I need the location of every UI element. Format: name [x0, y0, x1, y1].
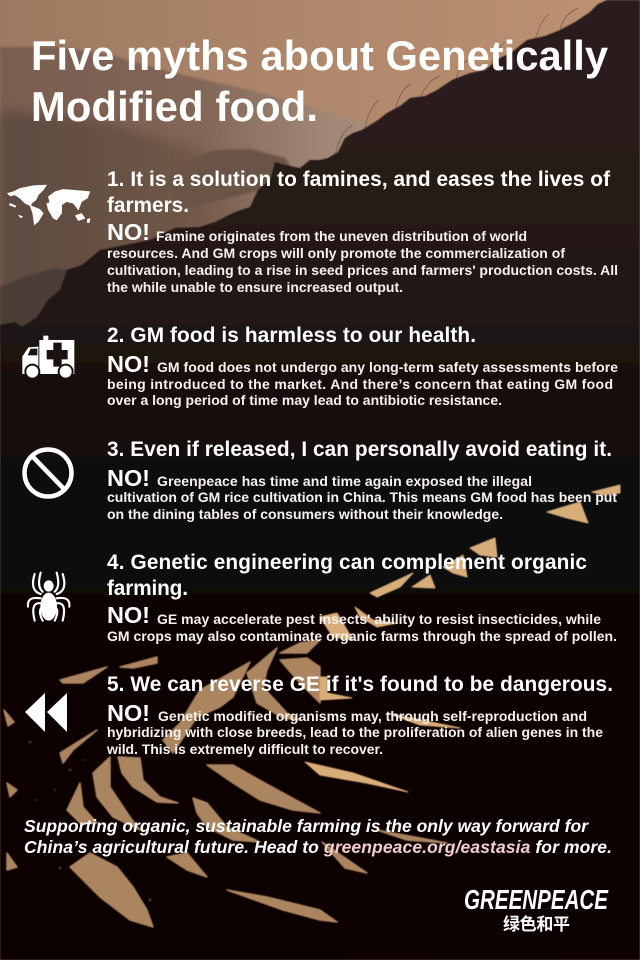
icon: world map: [7, 185, 90, 225]
answer: myth 1: resources. And GM crops will only promote the commercialization of: [107, 245, 565, 261]
closing call to action: Supporting organic, sustainable farming is the only way forward for: [24, 816, 589, 836]
answer: myth 2: [107, 351, 618, 408]
icon: ambulance: [22, 336, 74, 380]
heading: myth 1: 1. It is a solution to famines, and eases the lives of: [107, 168, 610, 191]
panel: myth 2: [22, 324, 618, 408]
logo: Greenpeace: 绿色和平: [503, 914, 570, 934]
answer: myth 1: [107, 219, 618, 295]
answer: myth 4: GM crops may also contaminate organic farms through the spread of pollen.: [107, 628, 617, 644]
answer: myth 2: over a long period of time may lead to antibiotic resistance.: [107, 392, 502, 408]
answer: myth 1: the while unable to ensure increased output.: [107, 279, 403, 295]
closing call to action: China’s agricultural future. Head to greenpeace.org/eastasia for more.: [24, 837, 612, 857]
answer: myth 5: [106, 700, 603, 757]
answer: myth 2: NO!: [107, 351, 150, 377]
answer: myth 1: Famine originates from the uneven distribution of world: [156, 228, 527, 244]
answer: myth 1: NO!: [107, 219, 150, 245]
icon: rewind: [25, 693, 67, 732]
answer: myth 3: on the dining tables of consumers without their knowledge.: [107, 506, 503, 522]
answer: myth 3: [107, 465, 617, 522]
heading: myth 3: 3. Even if released, I can personally avoid eating it.: [107, 438, 612, 461]
panel: myth 4: [28, 551, 617, 644]
panel: myth 1: [7, 168, 618, 295]
heading: myth 4: 4. Genetic engineering can complement organic: [107, 551, 587, 574]
answer: myth 3: Greenpeace has time and time again exposed the illegal: [157, 473, 532, 489]
title: Five myths about Genetically: [31, 32, 608, 79]
answer: myth 5: wild. This is extremely difficult to recover.: [106, 741, 383, 757]
answer: myth 2: GM food does not undergo any long-term safety assessments before: [157, 359, 618, 375]
answer: myth 5: hybridizing with close breeds, lead to the proliferation of alien genes in the: [107, 724, 603, 740]
heading: myth 4: [107, 551, 587, 600]
answer: myth 2: being introduced to the market. And there’s concern that eating GM food: [107, 376, 613, 392]
title: Modified food.: [31, 83, 318, 130]
answer: myth 5: Genetic modified organisms may, through self-reproduction and: [158, 708, 587, 724]
title: [31, 32, 608, 130]
answer: myth 5: NO!: [107, 700, 150, 726]
closing call to action: [24, 816, 612, 857]
icon: prohibited sign: [24, 450, 72, 496]
icon: spider: [28, 573, 69, 621]
answer: myth 4: NO!: [107, 602, 150, 628]
answer: myth 1: cultivation, leading to a rise in seed prices and farmers' production costs. All: [107, 262, 618, 278]
answer: myth 4: GE may accelerate pest insects' ability to resist insecticides, while: [157, 611, 601, 627]
heading: myth 1: farmers.: [107, 194, 189, 217]
panel: myth 5: [25, 673, 613, 757]
heading: myth 5: 5. We can reverse GE if it's found to be dangerous.: [107, 673, 613, 696]
panel: myth 3: [24, 438, 617, 522]
answer: myth 3: NO!: [107, 465, 150, 491]
heading: myth 4: farming.: [107, 577, 188, 600]
answer: myth 4: [107, 602, 617, 644]
answer: myth 3: cultivation of GM rice cultivation in China. This means GM food has been put: [107, 489, 617, 505]
logo: Greenpeace: [464, 884, 609, 934]
heading: myth 1: [107, 168, 610, 217]
heading: myth 2: 2. GM food is harmless to our health.: [107, 324, 476, 347]
